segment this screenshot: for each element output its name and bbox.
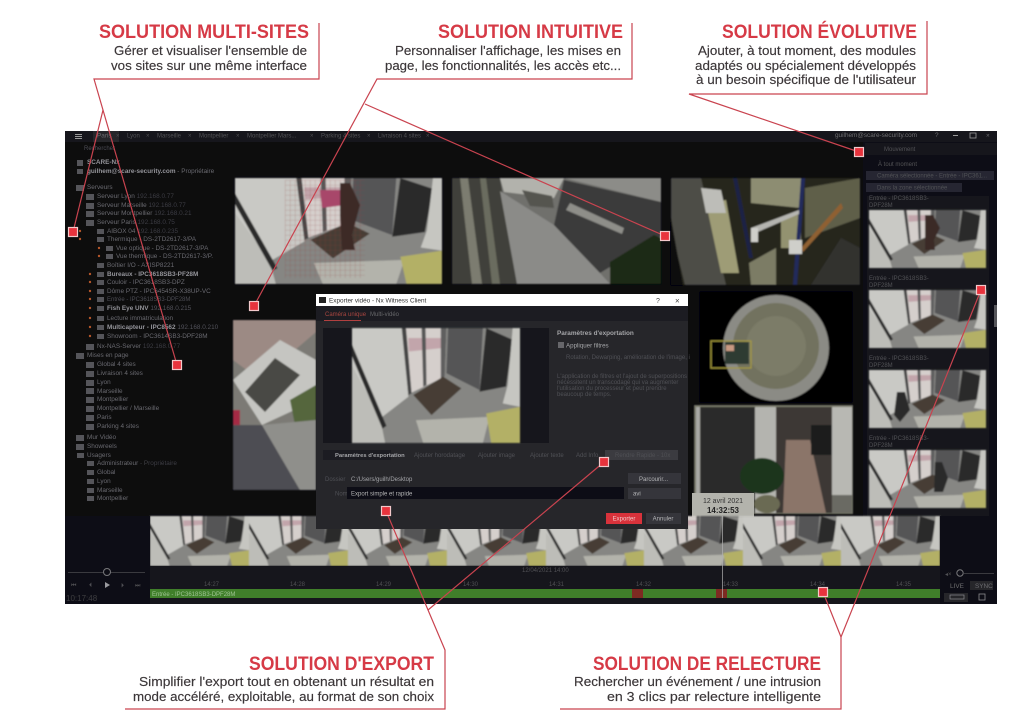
callout: multi-sites: Gérer et visualiser l'ensemble de bbox=[114, 44, 307, 58]
export file fields: Dossier bbox=[325, 477, 345, 483]
sidebar tree: Multicapteur - IPC8562 192.168.0.210 bbox=[107, 324, 219, 331]
sidebar tree: Usagers bbox=[87, 452, 111, 459]
export buttons: Exporter bbox=[613, 516, 635, 522]
timeline: 10:17:48 bbox=[66, 594, 98, 603]
sidebar tree bbox=[65, 142, 219, 517]
timeline: ⏮ bbox=[71, 583, 77, 589]
right events panel: DPF28M bbox=[869, 203, 893, 209]
timeline: 12/04/2021 14:00 bbox=[522, 568, 569, 574]
timeline: 14:31 bbox=[549, 582, 565, 588]
callout: relecture: SOLUTION DE RELECTURE bbox=[593, 654, 821, 675]
sidebar tree: Showreels bbox=[87, 443, 117, 450]
export dialog bbox=[316, 294, 690, 529]
callout: multi-sites bbox=[73, 22, 319, 365]
export buttons bbox=[606, 513, 681, 524]
right events panel: Dans la zone sélectionnée bbox=[877, 186, 948, 192]
sidebar tree: Lyon bbox=[97, 379, 111, 386]
export dialog: ? bbox=[656, 298, 660, 305]
sidebar tree: Marseille bbox=[97, 487, 123, 494]
camera: warehouse bbox=[671, 178, 860, 285]
tab bar: × bbox=[986, 132, 990, 140]
export toolbar: Paramètres d'exportation bbox=[335, 453, 405, 459]
export settings: Appliquer filtres bbox=[566, 342, 609, 350]
tab bar: guilhem@scare-security.com bbox=[835, 132, 917, 139]
sidebar tree: Montpellier / Marseille bbox=[97, 405, 160, 412]
sidebar tree: Administrateur - Propriétaire bbox=[97, 460, 177, 467]
export toolbar: Ajouter image bbox=[478, 453, 516, 459]
timeline: 14:30 bbox=[463, 582, 479, 588]
callout: evolutive: SOLUTION ÉVOLUTIVE bbox=[722, 21, 917, 43]
sidebar tree: Entrée - IPC3618SB3-DPF28M bbox=[107, 297, 190, 303]
tab bar: Paris bbox=[97, 132, 112, 140]
camera: office bbox=[452, 178, 661, 284]
callout: intuitive: SOLUTION INTUITIVE bbox=[438, 22, 623, 43]
export file fields: avi bbox=[633, 492, 641, 498]
callout: export: SOLUTION D'EXPORT bbox=[249, 654, 434, 675]
sidebar tree: Couloir - IPC3618SB3-DPZ bbox=[107, 279, 185, 286]
tab bar: × bbox=[310, 134, 314, 140]
export toolbar: Ajouter texte bbox=[530, 453, 564, 459]
sidebar tree: Bureaux - IPC3618SB3-PF28M bbox=[107, 271, 198, 278]
export file fields bbox=[325, 473, 681, 499]
sidebar tree: Montpellier bbox=[97, 495, 129, 502]
right events panel bbox=[863, 142, 997, 517]
export toolbar: Ajouter horodatage bbox=[414, 453, 466, 459]
camera: rotated entrance bbox=[233, 320, 316, 490]
export settings: Rotation, Dewarping, amélioration de l'image, i bbox=[566, 355, 690, 361]
export dialog: Exporter vidéo - Nx Witness Client bbox=[329, 298, 427, 304]
timeline: SYNC bbox=[975, 583, 993, 590]
right events panel: DPF28M bbox=[869, 283, 893, 289]
export settings: Paramètres d'exportation bbox=[557, 330, 634, 337]
callout: export: mode accéléré, exploitable, au format de son choix bbox=[133, 690, 435, 704]
right events panel: DPF28M bbox=[869, 363, 893, 369]
timeline: ◂× bbox=[945, 572, 952, 578]
tab bar: Montpellier bbox=[199, 134, 228, 140]
right events panel: Entrée - IPC3618SB3- bbox=[869, 356, 929, 362]
export settings bbox=[557, 330, 690, 398]
right events panel: DPF28M bbox=[869, 443, 893, 449]
export settings: beaucoup de temps. bbox=[557, 392, 612, 398]
callout: intuitive bbox=[254, 22, 665, 306]
sidebar tree: Global 4 sites bbox=[97, 361, 136, 368]
sidebar tree: SCARE-Nx bbox=[87, 159, 120, 166]
right events panel: Entrée - IPC3618SB3- bbox=[869, 196, 929, 202]
date label bbox=[692, 493, 754, 517]
timeline thumbnails bbox=[150, 516, 940, 566]
right events panel: Entrée - IPC3618SB3- bbox=[869, 436, 929, 442]
callout: evolutive: Ajouter, à tout moment, des modules bbox=[698, 44, 916, 58]
sidebar tree: Vue optique - DS-2TD2617-3/PA bbox=[116, 245, 209, 252]
tab bar: Lyon bbox=[127, 134, 140, 140]
sidebar tree: Boîtier I/O - AXISP8221 bbox=[107, 262, 175, 269]
tab bar: Montpellier Mars... bbox=[247, 134, 297, 140]
export dialog: × bbox=[675, 296, 680, 306]
timeline: ⏭ bbox=[135, 583, 141, 589]
date label: 12 avril 2021 bbox=[703, 498, 743, 505]
callout: intuitive: page, les fonctionnalités, les accès etc... bbox=[385, 59, 621, 73]
timeline: 14:33 bbox=[723, 582, 739, 588]
timeline: 14:32 bbox=[636, 582, 652, 588]
sidebar tree: Paris bbox=[97, 414, 112, 421]
timeline: 14:35 bbox=[896, 582, 912, 588]
camera views bbox=[233, 178, 860, 514]
timeline: 14:34 bbox=[810, 582, 826, 588]
sidebar tree: Fish Eye UNV 192.168.0.215 bbox=[107, 305, 192, 312]
camera: entrance with person and motion grid bbox=[235, 178, 442, 284]
timeline: Entrée - IPC3618SB3-DPF28M bbox=[152, 592, 235, 598]
sidebar tree: Marseille bbox=[97, 388, 123, 395]
tab bar: Marseille bbox=[157, 134, 182, 140]
tab bar bbox=[65, 131, 997, 142]
timeline: 14:27 bbox=[204, 582, 220, 588]
callout: relecture: en 3 clics par relecture intelligente bbox=[607, 690, 821, 704]
sidebar tree: Livraison 4 sites bbox=[97, 370, 143, 377]
export file fields: C:/Users/guilh/Desktop bbox=[351, 477, 413, 483]
export file fields: Nom bbox=[335, 492, 348, 498]
sidebar tree: Lyon bbox=[97, 478, 111, 485]
sidebar tree: Serveur Lyon 192.168.0.77 bbox=[97, 193, 174, 200]
sidebar tree: Vue thermique - DS-2TD2617-3/P. bbox=[116, 253, 213, 260]
sidebar tree: Lecture immatriculation bbox=[107, 315, 174, 322]
export dialog: Caméra unique bbox=[325, 312, 367, 318]
sidebar tree: Showroom - IPC3614SB3-DPF28M bbox=[107, 333, 208, 340]
sidebar tree: Rechercher bbox=[84, 146, 115, 152]
sidebar tree: Dôme PTZ - IPC6454SR-X38UP-VC bbox=[107, 288, 211, 295]
tab bar: × bbox=[146, 134, 150, 140]
camera: hallway with plant bbox=[694, 405, 853, 514]
export dialog: Multi-vidéo bbox=[370, 312, 400, 318]
export settings: L'application de filtres et l'ajout de superpositions bbox=[557, 374, 687, 380]
timeline bbox=[65, 516, 997, 604]
right events panel: Mouvement bbox=[884, 147, 916, 153]
tab bar: × bbox=[236, 134, 240, 140]
sidebar tree: Mur Vidéo bbox=[87, 434, 116, 441]
camera: fisheye bbox=[700, 292, 852, 402]
sidebar tree: Serveur Marseille 192.168.0.77 bbox=[97, 202, 186, 209]
application window bbox=[65, 131, 997, 604]
timeline: LIVE bbox=[950, 583, 964, 590]
tab bar: × bbox=[426, 134, 430, 140]
sidebar tree: Parking 4 sites bbox=[97, 423, 139, 430]
tab bar: × bbox=[116, 134, 120, 140]
timeline: ⏵ bbox=[121, 582, 124, 589]
markers bbox=[68, 148, 986, 596]
sidebar tree: Global bbox=[97, 469, 115, 476]
callout: intuitive: Personnaliser l'affichage, les mises en bbox=[395, 44, 621, 58]
callout: export bbox=[125, 462, 604, 709]
timeline: 14:29 bbox=[376, 582, 392, 588]
sidebar tree: Montpellier bbox=[97, 396, 129, 403]
export file fields: Parcourir... bbox=[639, 477, 668, 483]
export buttons: Annuler bbox=[653, 516, 673, 522]
timeline: 14:28 bbox=[290, 582, 306, 588]
callout: multi-sites: vos sites sur une même interface bbox=[111, 59, 307, 73]
tab bar: ? bbox=[935, 132, 939, 139]
sidebar tree: AIBOX 04 192.168.0.235 bbox=[107, 228, 179, 235]
callout: export: Simplifier l'export tout en obtenant un résultat en bbox=[139, 675, 434, 689]
tab bar: × bbox=[367, 134, 371, 140]
timeline: ⏴ bbox=[89, 582, 92, 589]
export toolbar bbox=[323, 450, 678, 460]
tab bar: × bbox=[188, 134, 192, 140]
sidebar tree: Mises en page bbox=[87, 352, 129, 359]
callout: relecture bbox=[560, 290, 981, 709]
tab bar: Livraison 4 sites bbox=[378, 134, 421, 140]
callout: multi-sites: SOLUTION MULTI-SITES bbox=[99, 22, 309, 43]
export settings: l'utilisation du processeur et peut prendre bbox=[557, 386, 667, 392]
callout: evolutive: adaptés ou spécialement développés bbox=[695, 59, 916, 73]
export toolbar: Rendre Rapide - 10x bbox=[615, 453, 670, 459]
right events panel: À tout moment bbox=[878, 161, 917, 168]
export file fields: Export simple et rapide bbox=[351, 492, 413, 498]
callout: relecture: Rechercher un événement / une intrusion bbox=[574, 675, 821, 689]
right events panel: Entrée - IPC3618SB3- bbox=[869, 276, 929, 282]
sidebar tree: guilhem@scare-security.com - Propriétaire bbox=[87, 168, 215, 175]
callout: evolutive: à un besoin spécifique de l'utilisateur bbox=[696, 73, 916, 87]
export settings: nécessitent un transcodage qui va augmenter bbox=[557, 380, 678, 386]
date label: 14:32:53 bbox=[707, 506, 740, 515]
export toolbar: Add Info bbox=[576, 453, 599, 459]
sidebar tree: Nx-NAS-Server 192.168.0.77 bbox=[97, 343, 181, 350]
callout: evolutive bbox=[689, 21, 927, 152]
tab bar: Parking 4 sites bbox=[321, 134, 360, 140]
sidebar tree: Serveur Montpellier 192.168.0.21 bbox=[97, 210, 192, 217]
right events panel: Caméra sélectionnée - Entrée - IPC361... bbox=[877, 174, 987, 180]
sidebar tree: Thermique - DS-2TD2617-3/PA bbox=[107, 236, 197, 243]
sidebar tree: Serveurs bbox=[87, 184, 113, 191]
sidebar tree: Serveur Paris 192.168.0.75 bbox=[97, 219, 175, 226]
